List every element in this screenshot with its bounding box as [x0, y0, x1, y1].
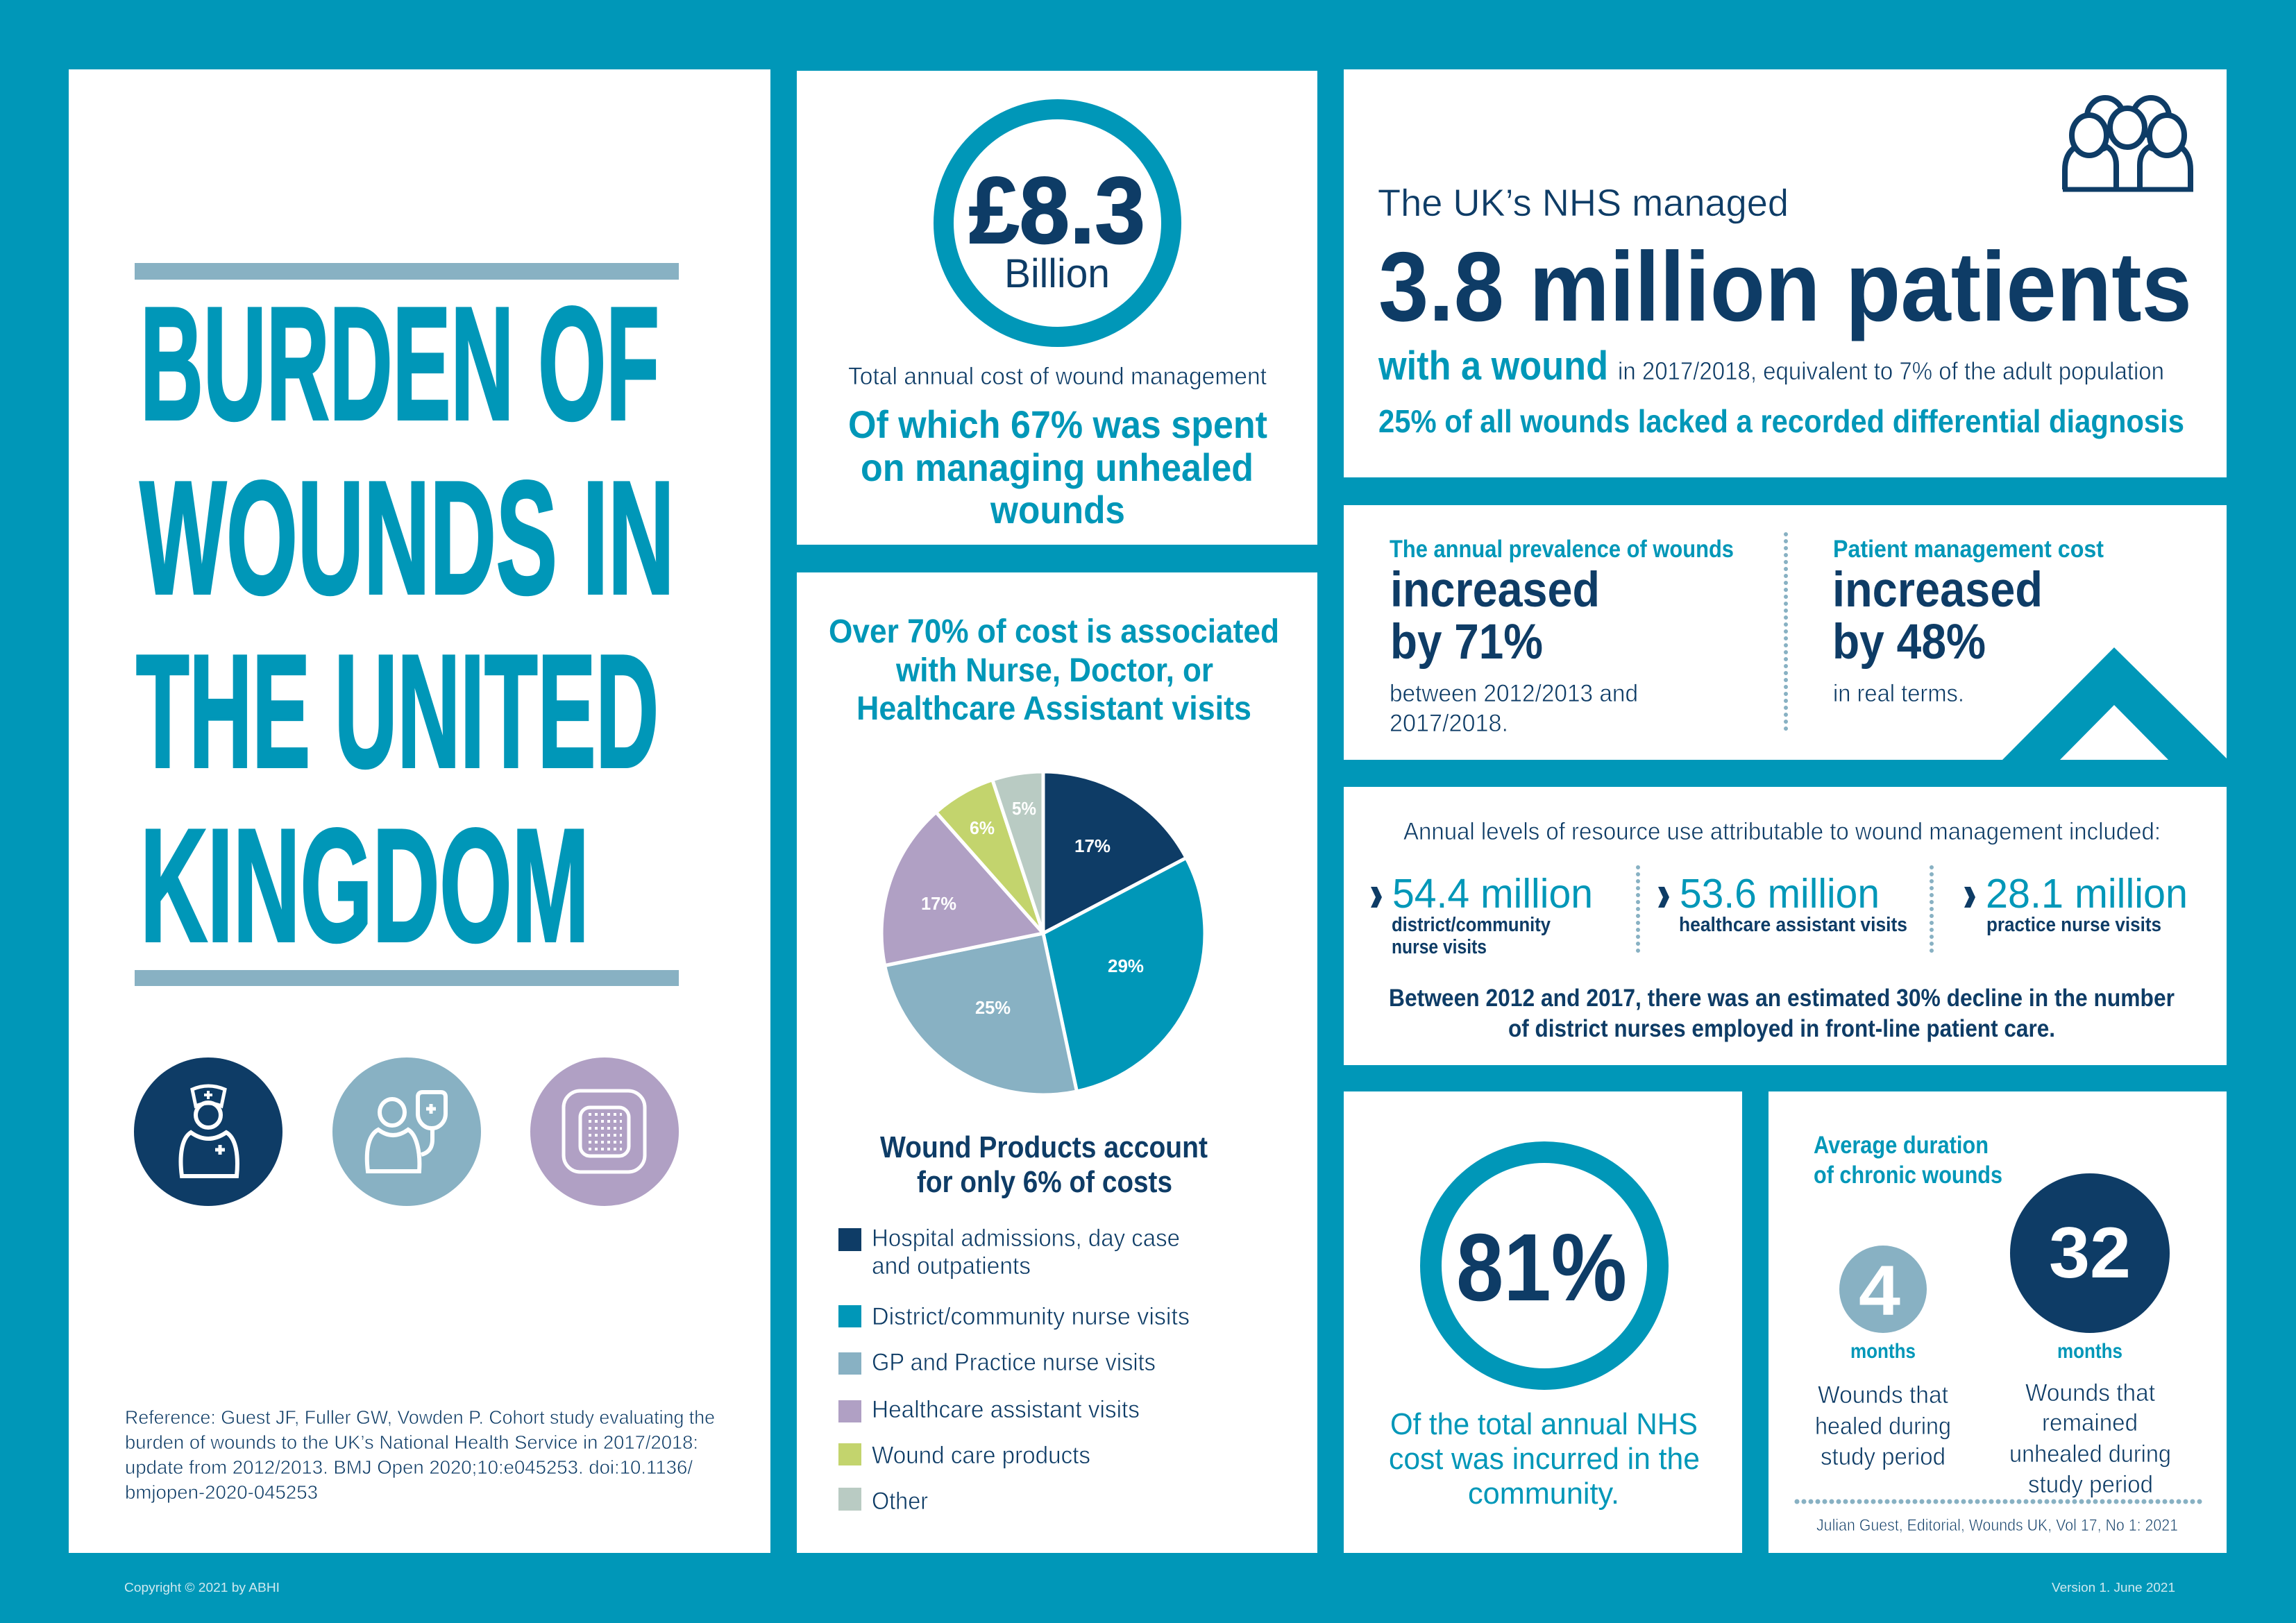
pie chart	[881, 772, 1205, 1095]
cost ring with figure	[944, 110, 1172, 337]
unhealed wounds statement: Of which 67% was spent	[848, 402, 1267, 446]
pie legend: Other	[872, 1488, 928, 1515]
stat: healthcare assistant visits: 53.6 million	[1680, 871, 1880, 917]
title	[135, 263, 679, 986]
management cost statistic: increased	[1832, 563, 2043, 618]
version footer: Version 1. June 2021	[2052, 1581, 2175, 1595]
healed wounds caption: study period	[1821, 1443, 1945, 1470]
community caption: Of the total annual NHS	[1390, 1407, 1698, 1441]
community caption: cost was incurred in the	[1389, 1442, 1700, 1476]
title: BURDEN OF	[140, 274, 659, 454]
prevalence statistic: increased	[1390, 563, 1600, 618]
title: THE UNITED	[136, 622, 659, 801]
resource use intro: Annual levels of resource use attributable to wound management included:	[1403, 818, 2161, 845]
reference text: update from 2012/2013. BMJ Open 2020;10:e045253. doi:10.1136/	[125, 1456, 693, 1478]
unhealed wounds caption: unhealed during	[2009, 1441, 2171, 1468]
stat: district nurse visits: 54.4 million	[1392, 871, 1593, 917]
unhealed wounds caption: remained	[2042, 1409, 2138, 1436]
pie heading: Healthcare Assistant visits	[856, 690, 1251, 727]
pie chart: 6%	[970, 817, 995, 838]
pie chart: 25%	[975, 997, 1011, 1018]
prevalence statistic: between 2012/2013 and	[1390, 680, 1638, 707]
stat: district nurse visits: nurse visits	[1392, 936, 1487, 958]
wound products statement: Wound Products account	[880, 1130, 1208, 1164]
prevalence statistic	[1390, 536, 1734, 737]
management cost statistic: by 48%	[1832, 615, 1986, 670]
community caption	[1389, 1407, 1700, 1511]
duration heading: Average duration	[1814, 1132, 1989, 1159]
unhealed wounds statement	[848, 402, 1267, 532]
stat: healthcare assistant visits	[1658, 871, 1907, 936]
pie legend: Healthcare assistant visits	[872, 1396, 1140, 1423]
pie legend: and outpatients	[872, 1252, 1031, 1280]
with a wound: with a wound	[1378, 343, 1608, 389]
prevalence statistic: by 71%	[1390, 615, 1543, 670]
cost caption: Total annual cost of wound management	[848, 363, 1267, 390]
reference text: Reference: Guest JF, Fuller GW, Vowden P. Cohort study evaluating the	[125, 1407, 715, 1428]
management cost statistic: in real terms.	[1833, 680, 1964, 707]
healed wounds caption	[1815, 1382, 1951, 1470]
unhealed wounds caption	[2009, 1379, 2171, 1498]
with a wound: in 2017/2018, equivalent to 7% of the adult population	[1618, 357, 2164, 385]
prevalence statistic: 2017/2018.	[1390, 710, 1508, 737]
stat: 4 months: months	[1850, 1340, 1916, 1363]
management cost statistic: Patient management cost	[1833, 536, 2104, 563]
pie legend: District/community nurse visits	[872, 1303, 1190, 1330]
stat: practice nurse visits: 28.1 million	[1986, 871, 2188, 917]
unhealed wounds statement: wounds	[990, 488, 1125, 532]
panel: prevalence and cost increase	[1344, 505, 2227, 760]
arrow: upward triangle	[2002, 647, 2227, 760]
healed wounds caption: healed during	[1815, 1413, 1951, 1440]
icon: nurse	[134, 1057, 282, 1206]
wound products statement: for only 6% of costs	[917, 1165, 1172, 1199]
panel: title and icons	[69, 69, 770, 1553]
prevalence statistic: The annual prevalence of wounds	[1390, 536, 1734, 563]
district nurse decline statement: Between 2012 and 2017, there was an estimated 30% decline in the number	[1389, 985, 2175, 1012]
icon: patient with drip bag	[332, 1057, 481, 1206]
with a wound	[1378, 343, 2164, 389]
unhealed wounds statement: on managing unhealed	[861, 445, 1253, 489]
ring with 81 percent	[1431, 1152, 1657, 1379]
icon: group of people	[2063, 98, 2193, 189]
cost ring with figure: £8.3	[969, 158, 1145, 263]
stat: 32 months: months	[2057, 1340, 2122, 1363]
unhealed wounds caption: Wounds that	[2025, 1379, 2155, 1407]
wound products statement	[880, 1130, 1208, 1199]
pie heading: Over 70% of cost is associated	[829, 613, 1279, 650]
title: KINGDOM	[140, 796, 589, 976]
stat: 32 months	[2010, 1173, 2170, 1363]
panel: wound duration	[1769, 1091, 2227, 1553]
title: WOUNDS IN	[140, 448, 675, 628]
pie legend: Wound care products	[872, 1442, 1090, 1469]
patients headline: 3.8 million patients	[1378, 232, 2192, 342]
district nurse decline statement	[1389, 985, 2175, 1042]
stat: 4 months	[1839, 1246, 1927, 1363]
panel: patients managed	[1344, 69, 2227, 477]
duration heading	[1814, 1132, 2002, 1189]
copyright footer: Copyright © 2021 by ABHI	[124, 1581, 280, 1595]
stat: 4 months: 4	[1859, 1251, 1900, 1330]
pie chart: 17%	[1074, 835, 1111, 856]
reference text: bmjopen-2020-045253	[125, 1481, 318, 1503]
reference text	[125, 1407, 715, 1503]
pie legend: Hospital admissions, day case	[872, 1225, 1180, 1252]
stat: district nurse visits	[1371, 871, 1593, 958]
management cost statistic	[1832, 536, 2104, 707]
cost ring with figure: Billion	[1004, 251, 1110, 296]
healed wounds caption: Wounds that	[1818, 1382, 1948, 1409]
panel: cost breakdown	[797, 572, 1317, 1553]
icon: wound dressing	[530, 1057, 679, 1206]
pie legend: GP and Practice nurse visits	[872, 1349, 1156, 1376]
pie chart: 17%	[921, 893, 956, 914]
pie chart: 5%	[1012, 798, 1036, 819]
patients intro: The UK’s NHS managed	[1378, 181, 1789, 224]
stat: 32 months: 32	[2049, 1213, 2131, 1293]
stat: healthcare assistant visits: healthcare assistant visits	[1679, 914, 1907, 936]
stat: practice nurse visits: practice nurse visits	[1986, 914, 2161, 936]
panel: community cost	[1344, 1091, 1742, 1553]
duration source: Julian Guest, Editorial, Wounds UK, Vol 17, No 1: 2021	[1816, 1516, 2178, 1535]
panel: total cost	[797, 71, 1317, 545]
pie legend	[838, 1225, 1190, 1515]
duration heading: of chronic wounds	[1814, 1162, 2002, 1189]
unhealed wounds caption: study period	[2028, 1471, 2153, 1498]
community caption: community.	[1468, 1477, 1619, 1511]
differential diagnosis statement: 25% of all wounds lacked a recorded differential diagnosis	[1378, 403, 2184, 439]
stat: practice nurse visits	[1964, 871, 2188, 936]
reference text: burden of wounds to the UK’s National Health Service in 2017/2018:	[125, 1431, 698, 1453]
pie chart: 29%	[1108, 955, 1144, 976]
district nurse decline statement: of district nurses employed in front-line patient care.	[1508, 1015, 2055, 1042]
stat: district nurse visits: district/community	[1392, 914, 1551, 936]
panel: resource use	[1344, 787, 2227, 1065]
pie heading: with Nurse, Doctor, or	[895, 652, 1213, 689]
pie heading	[829, 613, 1279, 727]
ring with 81 percent: 81%	[1456, 1214, 1627, 1321]
